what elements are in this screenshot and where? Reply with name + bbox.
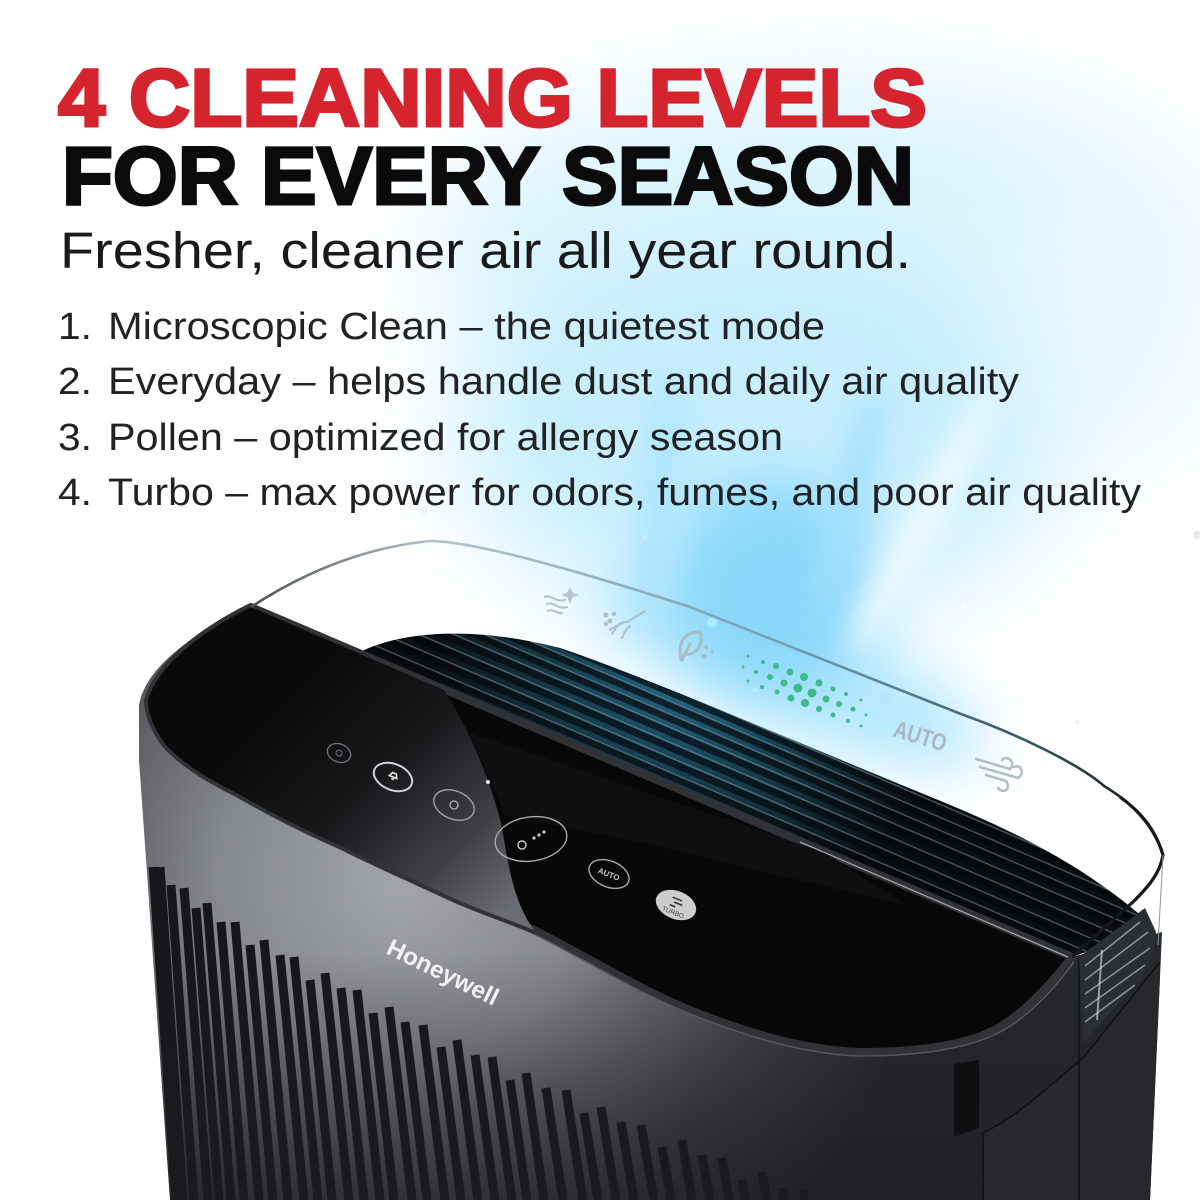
level 4: 4. (58, 472, 92, 514)
level 1: 1. (58, 306, 92, 348)
button: auto (585, 854, 633, 894)
front intake vents (130, 867, 1170, 1200)
level 3: 3. (58, 417, 92, 459)
cleaning levels list (58, 306, 1141, 514)
icon: pollen leaf (680, 632, 714, 660)
button: timer (325, 740, 353, 766)
title line 1: 4 CLEANING LEVELS (58, 53, 927, 144)
level 2: Everyday – helps handle dust and daily air quality (108, 361, 1019, 403)
button: turbo active (651, 884, 701, 926)
transparent glass display (251, 541, 1163, 957)
right side dark housing (1150, 971, 1160, 1200)
icon: auto label: AUTO (890, 716, 950, 758)
side tab notch (954, 1060, 979, 1137)
icon: turbo wind (976, 758, 1022, 791)
icon: broom dust (604, 611, 645, 638)
title (58, 53, 927, 222)
status dot (486, 780, 490, 784)
level 3: Pollen – optimized for allergy season (108, 417, 783, 459)
touch buttons (325, 740, 701, 926)
top grille (363, 634, 1154, 956)
control panel black glass (148, 607, 1072, 1052)
icon: microscopic clean dots active (742, 654, 868, 728)
button: auto: AUTO (597, 866, 621, 883)
subtitle: Fresher, cleaner air all year round. (60, 222, 911, 279)
level 4: Turbo – max power for odors, fumes, and poor air quality (108, 472, 1141, 514)
button: power and dots (492, 812, 570, 866)
button: light (370, 757, 416, 797)
reflection on panel (470, 733, 908, 906)
button: turbo active: TURBO (661, 905, 685, 920)
level 2: 2. (58, 361, 92, 403)
highlight on panel edge (800, 842, 1068, 957)
air particles (420, 460, 1200, 724)
brand logo: Honeywell (382, 934, 503, 1011)
housing seams (983, 957, 1160, 1200)
level 1: Microscopic Clean – the quietest mode (108, 306, 825, 348)
button: info (429, 784, 479, 826)
title line 2: FOR EVERY SEASON (62, 131, 914, 222)
icon: sparkle air (545, 588, 577, 613)
air purifier (130, 540, 1180, 1200)
translucent left panel overlay (148, 607, 534, 930)
purifier body (139, 604, 1162, 1200)
right grille seen through glass (1079, 908, 1156, 1043)
power icon (518, 831, 545, 849)
filter door rim highlight (534, 934, 1074, 1056)
